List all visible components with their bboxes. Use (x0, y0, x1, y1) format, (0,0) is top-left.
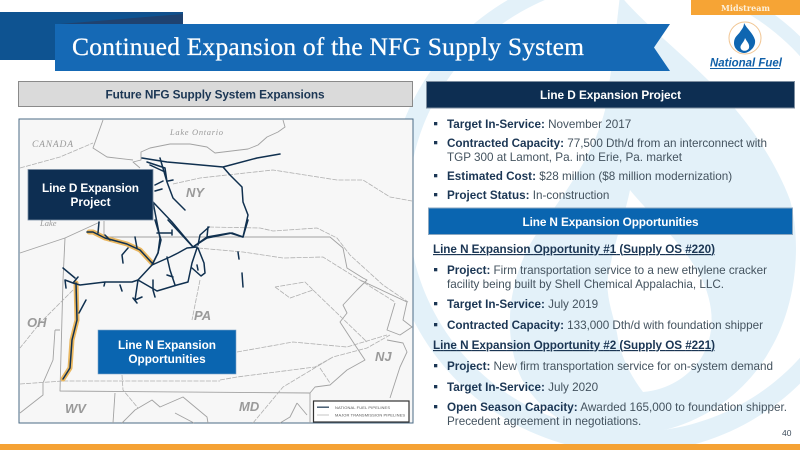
map legend: MAJOR TRANSMISSION PIPELINES (335, 412, 405, 418)
callout: Line D Expansion Project: Project (70, 195, 111, 209)
callout: Line D Expansion Project (28, 170, 153, 220)
heading: Future NFG Supply System Expansions (18, 82, 412, 106)
map: state and shoreline boundaries (20, 120, 412, 423)
map: state labels: NJ (375, 349, 392, 364)
text block: Line D details: Contracted Capacity: 77,500 Dth/d from an interconnect with (447, 137, 767, 150)
logo: National Fuel: National Fuel (710, 58, 783, 70)
map: state labels (27, 127, 392, 416)
map: highlighted expansion routes (63, 232, 152, 379)
text block: Line D details: Target In-Service: November 2017 (447, 118, 631, 131)
background watermark: flame and ring (387, 0, 800, 450)
heading: Line N Expansion Opportunities: Line N Expansion Opportunities (522, 215, 699, 229)
text block: Line N opportunity 1: Line N Expansion Opportunity #1 (Supply OS #220) (433, 243, 715, 256)
footer bar (0, 444, 800, 450)
text block: Line N opportunity 2: Precedent agreement in negotiations. (447, 415, 641, 428)
page number: 40 (782, 428, 792, 438)
text block: Line N opportunity 2: Open Season Capacity: Awarded 165,000 to foundation shipper. (447, 401, 787, 414)
map: state labels: PA (194, 308, 211, 323)
map legend (314, 401, 409, 422)
text block: Line N opportunity 2: Target In-Service: July 2020 (447, 381, 599, 394)
text block: Line D details (434, 118, 767, 202)
map: state labels: NY (186, 185, 205, 200)
callout: Line N Expansion Opportunities: Opportunities (128, 352, 206, 366)
map: state labels: OH (27, 315, 47, 330)
map: state labels: CANADA (32, 140, 73, 150)
map: state labels: MD (239, 399, 260, 414)
text block: Line N opportunity 1: Contracted Capacity: 133,000 Dth/d with foundation shipper (447, 319, 763, 332)
text block: Line N opportunity 1: facility being built by Shell Chemical Appalachia, LLC. (447, 278, 724, 291)
heading: Line D Expansion Project (426, 82, 794, 108)
header accent block (0, 12, 183, 60)
text block: Line D details: TGP 300 at Lamont, Pa. into Erie, Pa. market (447, 151, 683, 164)
text block: Line D details: Project Status: In-construction (447, 189, 609, 202)
callout: Line D Expansion Project: Line D Expansion (42, 181, 139, 195)
map: National Fuel pipelines (63, 154, 280, 379)
section tag: Midstream: Midstream (721, 3, 771, 13)
text block: Line N opportunity 2: Line N Expansion Opportunity #2 (Supply OS #221) (433, 339, 715, 352)
map legend: NATIONAL FUEL PIPELINES (335, 405, 390, 410)
text block: Line N opportunity 2: Project: New firm transportation service for on-system demand (447, 360, 773, 373)
heading: Line N Expansion Opportunities (428, 208, 792, 234)
title ribbon (55, 24, 670, 71)
text block: Line N opportunity 1: Project: Firm transportation service to a new ethylene cracker (447, 264, 767, 277)
logo: National Fuel (710, 22, 783, 70)
section tag: Midstream (691, 0, 800, 15)
map: state labels: WV (65, 401, 87, 416)
panel: pipeline map (19, 119, 413, 423)
text block: Line N opportunity 1 (433, 243, 767, 332)
heading: Future NFG Supply System Expansions: Future NFG Supply System Expansions (106, 88, 325, 102)
title ribbon: Continued Expansion of the NFG Supply System (72, 32, 584, 61)
callout: Line N Expansion Opportunities (98, 330, 236, 374)
heading: Line D Expansion Project: Line D Expansion Project (540, 88, 681, 102)
map: state labels: Lake Ontario (169, 127, 223, 137)
map: state labels: Lake (39, 218, 57, 228)
text block: Line N opportunity 2 (433, 339, 787, 428)
callout: Line N Expansion Opportunities: Line N Expansion (118, 338, 216, 352)
text block: Line N opportunity 1: Target In-Service: July 2019 (447, 298, 598, 311)
text block: Line D details: Estimated Cost: $28 million ($8 million modernization) (447, 170, 732, 183)
